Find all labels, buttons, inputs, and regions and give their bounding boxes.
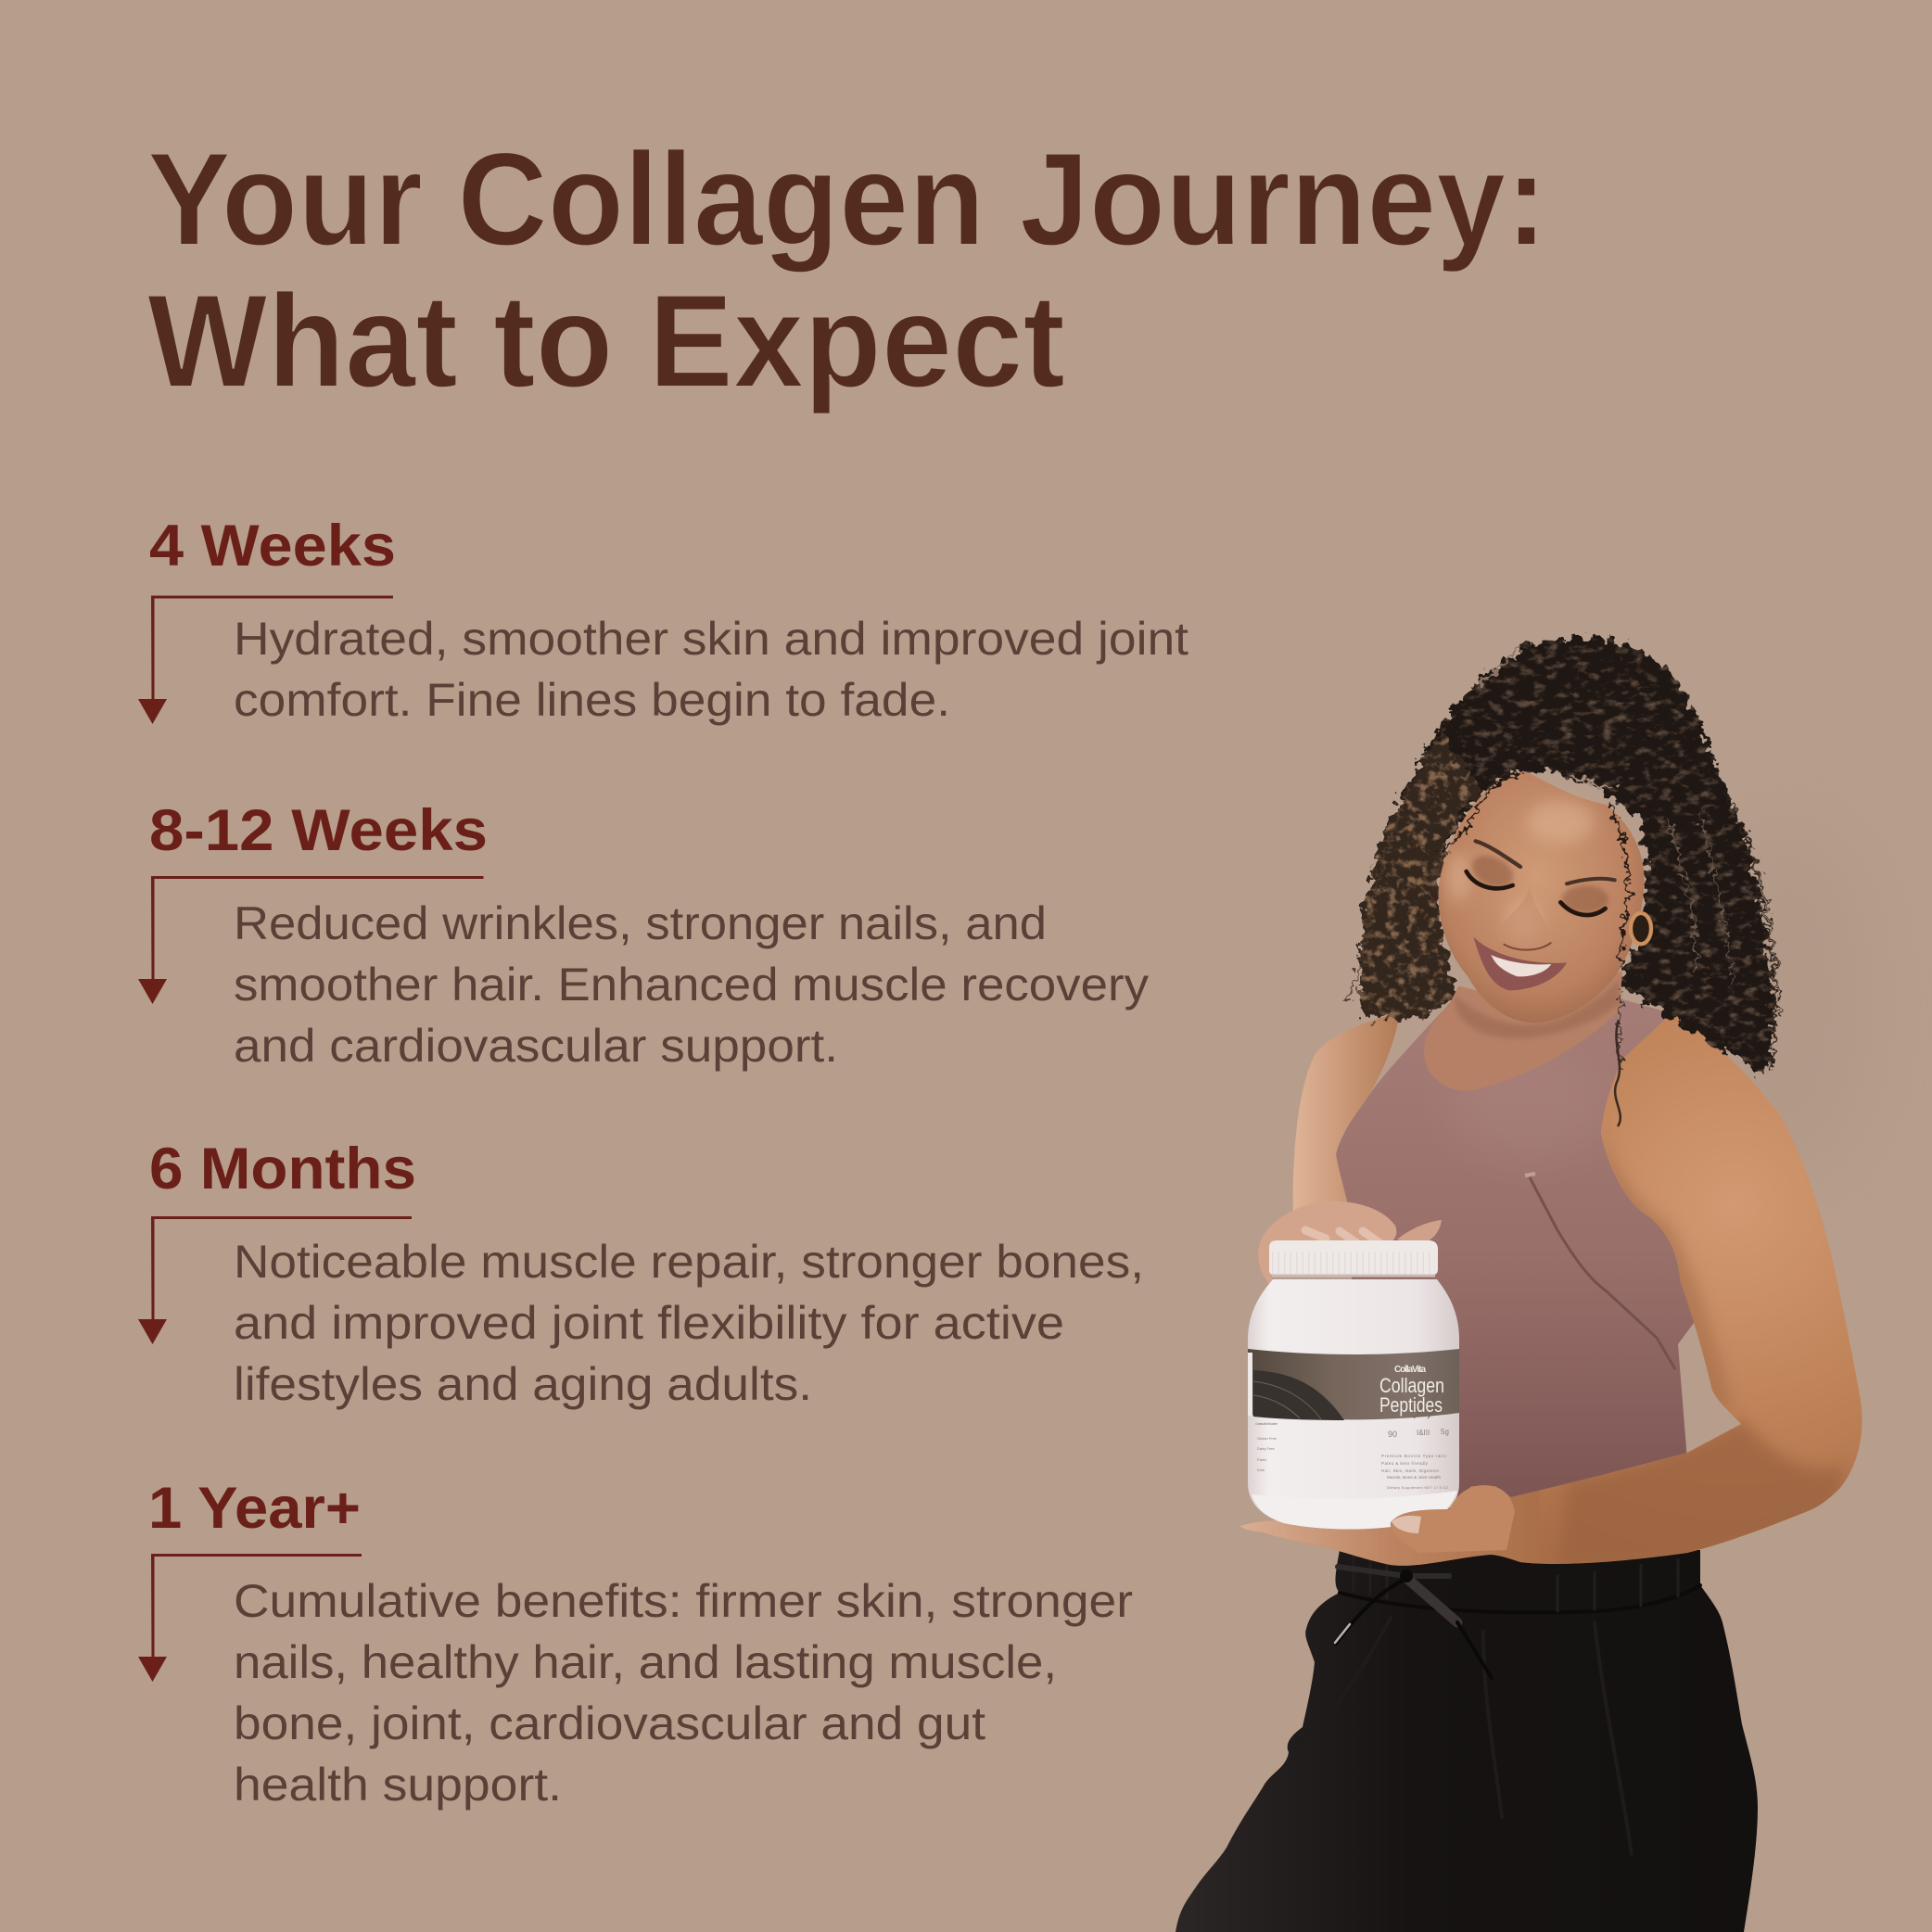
stray curl over shoulder bbox=[1615, 1020, 1621, 1126]
text block: 4 Weeks: Hydrated, smoother skin and improved joint bbox=[234, 613, 1188, 665]
text block: 1 Year+: bone, joint, cardiovascular and gut bbox=[234, 1697, 985, 1749]
text block: 1 Year+: health support. bbox=[234, 1759, 562, 1811]
jar small print: Dairy Free bbox=[1257, 1446, 1275, 1451]
jar small print: Gluten Free bbox=[1257, 1436, 1277, 1441]
heading: 1 Year+: 1 Year+ bbox=[148, 1476, 361, 1541]
text block: 6 Months: lifestyles and aging adults. bbox=[234, 1358, 812, 1410]
jar small print bbox=[1255, 1421, 1449, 1490]
arrow: 4 Weeks bbox=[138, 595, 393, 724]
jar small print: 5g bbox=[1441, 1428, 1449, 1436]
face bbox=[1439, 771, 1645, 1023]
jar small print: Paleo & keto friendly bbox=[1381, 1461, 1429, 1466]
eye shadows bbox=[1468, 850, 1608, 913]
step: 4 Weeks bbox=[138, 514, 1188, 726]
jar small print: Muscle, Bone & Joint Health bbox=[1387, 1475, 1441, 1480]
arrow: 8-12 Weeks bbox=[138, 876, 484, 1004]
pants bbox=[1176, 1550, 1758, 1932]
arrow: 6 Months bbox=[138, 1216, 412, 1344]
hair mass bbox=[1358, 638, 1773, 1073]
tank top bbox=[1336, 997, 1697, 1520]
arrow: 1 Year+ bbox=[138, 1554, 362, 1682]
forehead and cheek highlights bbox=[1446, 800, 1595, 943]
right arm and hand bbox=[1233, 1010, 1882, 1576]
jar small print: Hair, Skin, Nails, Digestive bbox=[1381, 1468, 1439, 1473]
left arm bbox=[1293, 1012, 1400, 1252]
text block: 6 Months: Noticeable muscle repair, stronger bones, bbox=[234, 1236, 1144, 1288]
thumb over jar bbox=[1391, 1485, 1515, 1553]
heading: 6 Months: 6 Months bbox=[149, 1137, 416, 1201]
jar label band bbox=[1248, 1349, 1459, 1419]
title: Your Collagen Journey: bbox=[147, 126, 1547, 273]
text block: 8-12 Weeks: smoother hair. Enhanced muscle recovery bbox=[234, 959, 1149, 1010]
heading: 8-12 Weeks: 8-12 Weeks bbox=[149, 798, 488, 863]
text block: 4 Weeks bbox=[234, 613, 1188, 726]
title: What to Expect bbox=[147, 268, 1065, 415]
jar small print: 90 bbox=[1388, 1430, 1397, 1439]
text block: 8-12 Weeks: and cardiovascular support. bbox=[234, 1020, 838, 1072]
nose bbox=[1499, 887, 1553, 951]
upper hand on lid bbox=[1258, 1201, 1442, 1287]
text block: 1 Year+: Cumulative benefits: firmer skin, stronger bbox=[234, 1575, 1133, 1627]
jar brand text: Peptides bbox=[1379, 1393, 1443, 1417]
heading: 4 Weeks: 4 Weeks bbox=[149, 514, 396, 578]
neck and chest bbox=[1424, 971, 1622, 1091]
text block: 1 Year+ bbox=[234, 1575, 1133, 1811]
text block: 6 Months: and improved joint flexibility for active bbox=[234, 1297, 1064, 1349]
loose curls bbox=[1344, 649, 1780, 1069]
eyebrows bbox=[1476, 841, 1615, 883]
step: 8-12 Weeks bbox=[138, 798, 1149, 1072]
step: 6 Months bbox=[138, 1137, 1144, 1410]
jar small print: Paleo bbox=[1257, 1457, 1267, 1462]
text block: 8-12 Weeks: Reduced wrinkles, stronger nails, and bbox=[234, 897, 1047, 949]
jar small print: I&III bbox=[1417, 1429, 1430, 1437]
jar small print: Grass-fed Bovine bbox=[1255, 1421, 1278, 1426]
jar lid bbox=[1269, 1240, 1438, 1276]
jar brand text: CollaVita bbox=[1394, 1365, 1426, 1375]
text block: 4 Weeks: comfort. Fine lines begin to fade. bbox=[234, 674, 950, 726]
eyelashes bbox=[1467, 871, 1606, 915]
jar brand text bbox=[1379, 1365, 1444, 1417]
earring bbox=[1631, 913, 1651, 944]
head and hair bbox=[1344, 638, 1780, 1091]
smile bbox=[1473, 937, 1567, 990]
lighter brown curls on the left bbox=[1358, 732, 1483, 1021]
jar small print: Premium Bovine Type I&III bbox=[1381, 1454, 1446, 1458]
step: 1 Year+ bbox=[138, 1476, 1133, 1811]
photo: woman holding collagen jar bbox=[1176, 638, 1882, 1932]
jar body bbox=[1248, 1279, 1459, 1529]
title bbox=[147, 126, 1547, 415]
jar brand text: Collagen bbox=[1379, 1374, 1444, 1397]
collagen jar bbox=[1248, 1240, 1515, 1553]
text block: 1 Year+: nails, healthy hair, and lasting muscle, bbox=[234, 1636, 1057, 1688]
text block: 8-12 Weeks bbox=[234, 897, 1149, 1072]
soft backdrop shadow bbox=[1706, 825, 1873, 1177]
jar small print: Dietary Supplement NET 17.6 OZ bbox=[1387, 1486, 1449, 1490]
jar small print: Keto bbox=[1257, 1468, 1265, 1472]
text block: 6 Months bbox=[234, 1236, 1144, 1410]
